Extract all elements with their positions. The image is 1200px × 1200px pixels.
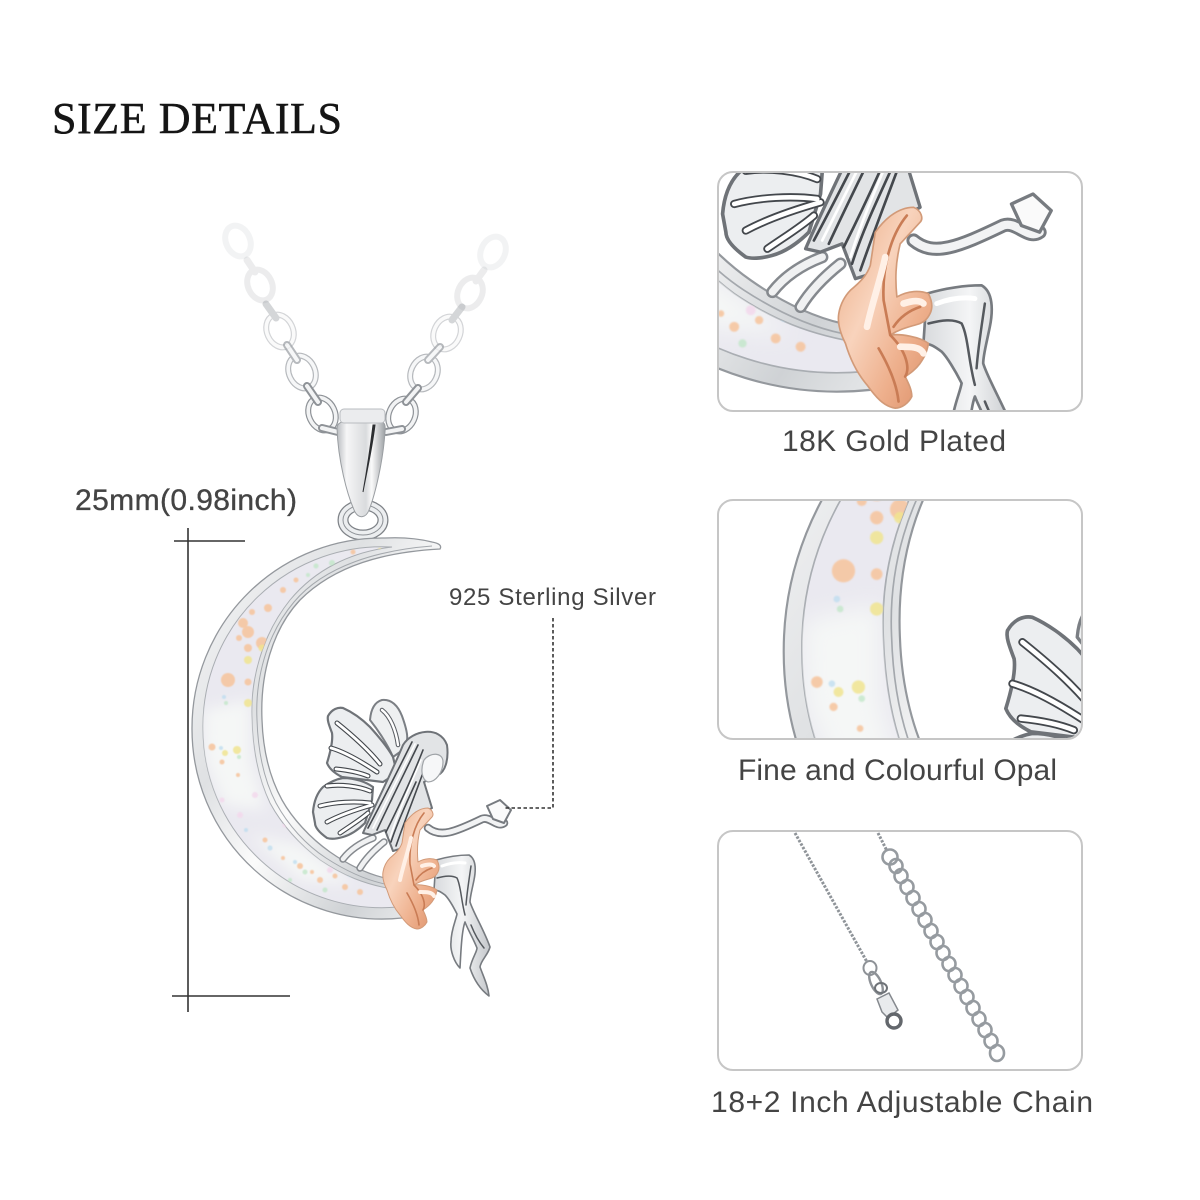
size label: 25mm(0.98inch) [75,484,297,517]
caption: opal: Fine and Colourful Opal [738,754,1057,787]
crescent moon with opal [192,538,441,919]
dimension line [172,528,290,1012]
caption: chain: 18+2 Inch Adjustable Chain [711,1086,1093,1119]
panel: chain detail [718,831,1082,1070]
panel: gold plated detail [717,171,1083,412]
fairy figure [313,700,511,996]
caption: gold plated: 18K Gold Plated [782,425,1006,458]
material label: 925 Sterling Silver [449,584,656,611]
infographic canvas [54,104,1092,1118]
jump ring [343,505,383,535]
necklace chain [220,221,511,436]
title: SIZE DETAILS [52,94,342,143]
panel: opal detail [717,499,1083,740]
bail [337,409,385,517]
dashed leader line [505,618,553,808]
